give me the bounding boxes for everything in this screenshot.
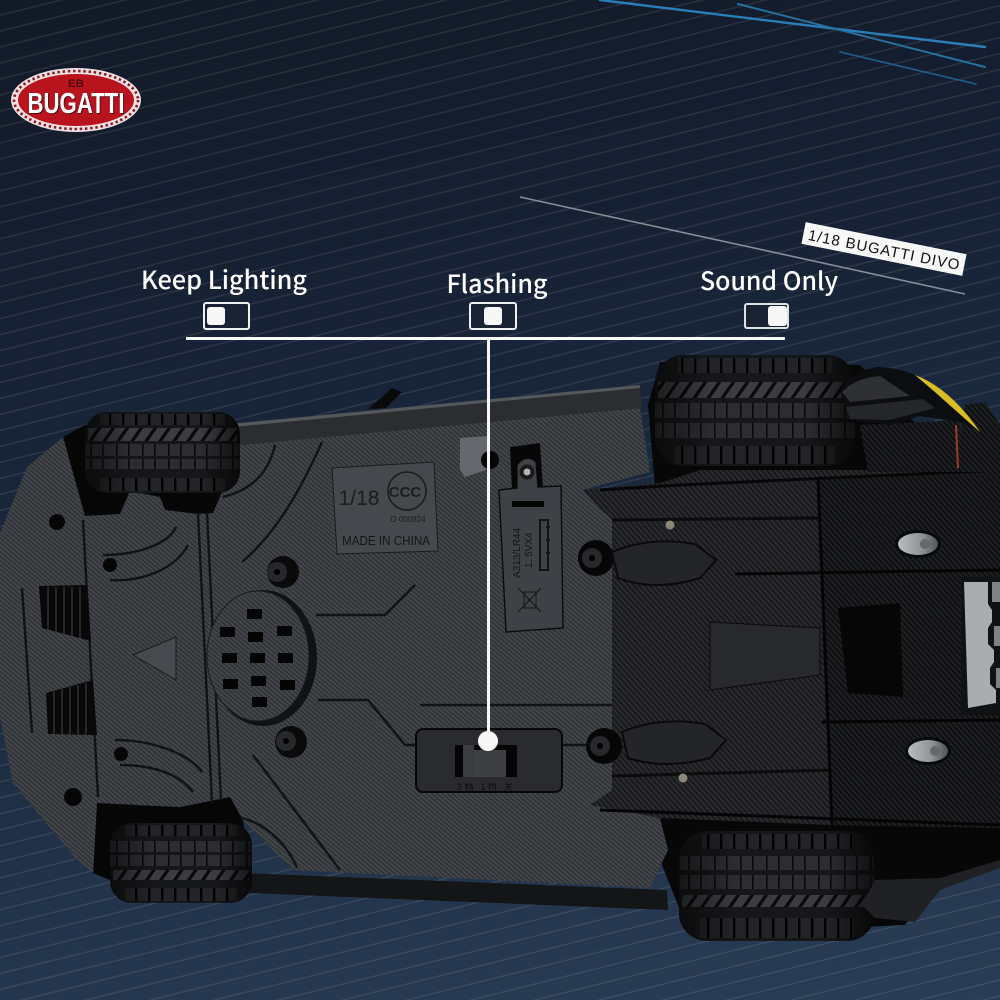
- switch label: Flashing: [446, 265, 548, 329]
- wheel: front lower left: [110, 823, 252, 903]
- bottom sill: [243, 873, 668, 910]
- slide switch: 2档 1档 关: [457, 781, 513, 792]
- logo: Bugatti badge: BUGATTI: [28, 89, 126, 121]
- connector line to switch: [186, 337, 785, 751]
- small screws: [666, 520, 688, 782]
- slide switch: [416, 729, 562, 792]
- triangular diffuser: [133, 637, 176, 680]
- top sill: [218, 385, 642, 445]
- switch label: Keep Lighting: [141, 261, 308, 329]
- switch label: Flashing: Flashing: [446, 265, 548, 301]
- wheel: rear upper: [655, 355, 855, 466]
- switch label: Sound Only: [700, 262, 838, 328]
- switch label: Sound Only: Sound Only: [700, 262, 838, 298]
- panel seams: [22, 442, 612, 870]
- lower rear fender: [862, 860, 1000, 922]
- tag: 1/18 Bugatti Divo: 1/18 BUGATTI DIVO: [807, 227, 961, 274]
- diagonal grey line: [520, 197, 965, 294]
- upper rear wheel well: [648, 362, 960, 488]
- logo: Bugatti badge: EB: [68, 78, 84, 90]
- speaker grille: [207, 590, 317, 726]
- dark rear chassis plate: [582, 470, 1000, 828]
- wheel: rear lower: [679, 831, 875, 941]
- certification plate: MADE IN CHINA: [342, 533, 430, 548]
- metal exhaust block: [961, 577, 1000, 715]
- underside vents: [39, 585, 97, 735]
- main carbon body: [0, 408, 668, 888]
- tab by battery cover: [460, 436, 488, 477]
- certification plate: [332, 462, 438, 554]
- mounting holes: [49, 514, 128, 806]
- car underside: [0, 355, 1000, 941]
- spoiler tip above car: [368, 388, 402, 409]
- logo: Bugatti badge: BUGATTI: [28, 88, 124, 120]
- screw posts: [267, 540, 622, 764]
- certification plate: O 000824: [390, 515, 426, 524]
- chassis wedges and window: [612, 541, 903, 764]
- front upper wheel well: [63, 425, 240, 516]
- upper rear fender and yellow stripe: [840, 367, 1000, 472]
- certification plate: 1/18: [339, 487, 379, 510]
- switch label: Keep Lighting: Keep Lighting: [141, 261, 308, 297]
- front lower wheel well: [93, 795, 250, 882]
- battery cover: 1. 5VX4: [524, 532, 535, 568]
- battery cover: [499, 443, 563, 632]
- lower rear wheel well: [655, 815, 1000, 935]
- rear metal bolts: [895, 530, 951, 765]
- battery cover: A313/LR44: [512, 528, 523, 578]
- wheel: front upper left: [85, 412, 240, 493]
- blue accent lines top right: [600, 0, 985, 84]
- chassis ridges: [600, 470, 1000, 825]
- certification plate: CCC: [389, 484, 421, 501]
- logo: Bugatti badge: [11, 68, 141, 132]
